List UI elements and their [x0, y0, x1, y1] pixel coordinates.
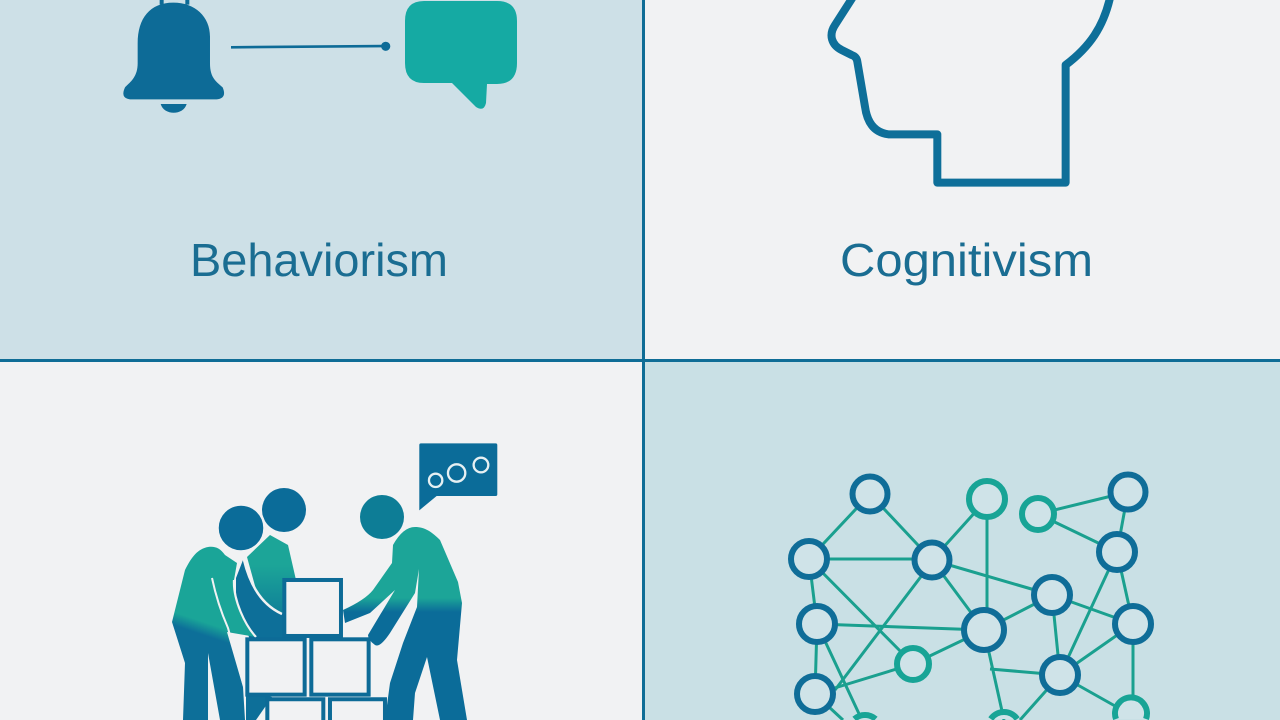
- icon: bell: [123, 0, 224, 113]
- figure: front left person: [172, 504, 264, 720]
- figure: back person: [236, 488, 306, 720]
- vertical divider: [642, 0, 645, 720]
- heading: Cognitivism: Cognitivism: [840, 234, 1093, 286]
- icon: speech bubble: [405, 1, 517, 109]
- network nodes: [791, 474, 1151, 719]
- horizontal divider: [0, 359, 1280, 362]
- network links: [809, 492, 1133, 720]
- icon: speech bubble with dots: [419, 443, 497, 510]
- icon: people building with blocks: [172, 443, 497, 720]
- panel: cognitivism: [645, 0, 1280, 359]
- icon: head outline: [832, 0, 1110, 183]
- figure: right person: [343, 495, 467, 720]
- arrow: stimulus to response line: [231, 42, 390, 51]
- panel: social constructivism: [0, 362, 642, 720]
- chart: network of nodes: [791, 474, 1151, 720]
- heading: Behaviorism: Behaviorism: [190, 234, 448, 286]
- panel: behaviorism: [0, 0, 642, 359]
- blocks: [247, 580, 385, 720]
- panel: connectivism: [645, 362, 1280, 720]
